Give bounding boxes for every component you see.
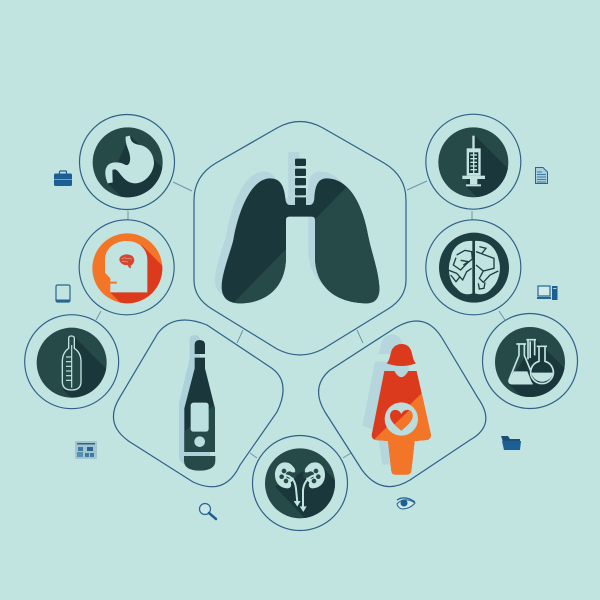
icon: flasks circle [482,312,578,410]
icon: clinical thermometer circle [24,314,120,410]
icon: computer [537,286,558,300]
connector lines [96,181,505,458]
panel: thermometer diamond outline [113,320,283,487]
icon: network diagram [75,441,97,459]
icon: tablet [56,285,70,302]
icon: cracked brain circle [426,220,521,315]
icon: digital thermometer [179,335,215,471]
icon: eye [397,498,415,509]
icon: syringe circle [425,114,522,210]
panel: hexagon lungs outline [194,122,406,355]
icon: stomach circle [78,114,176,210]
icon: briefcase [54,171,72,186]
icon: pregnant woman [362,335,431,475]
icon: lungs [215,152,379,303]
panel: woman diamond outline [319,321,486,487]
icon: kidneys circle [252,434,348,532]
icon: head with brain circle [78,219,175,316]
icon: magnifier [200,504,216,519]
icon: document [536,168,548,184]
icon: folder [501,436,521,450]
